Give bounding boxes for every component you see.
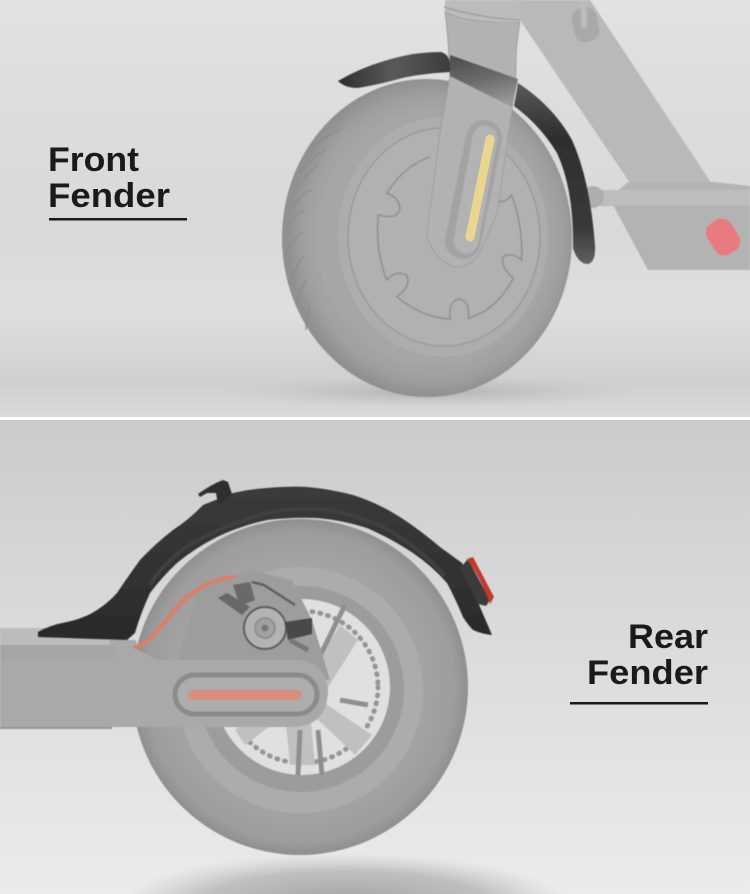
fork slot <box>463 138 485 241</box>
heading: Rear Fender: Fender <box>587 654 708 692</box>
scooter frame <box>515 0 750 270</box>
heading: Front Fender: Front <box>48 141 139 179</box>
tail strip <box>188 690 302 700</box>
heading: Rear Fender: Rear <box>628 618 708 656</box>
front fender shape <box>338 52 595 264</box>
rear fender shape <box>38 480 494 640</box>
heading: Rear Fender <box>570 618 708 704</box>
heading: Front Fender <box>48 141 187 220</box>
tail light housing <box>460 559 490 606</box>
rear wheel <box>132 519 468 855</box>
wheel <box>282 79 572 397</box>
heading: Front Fender: Fender <box>48 177 170 215</box>
panel: rear fender <box>0 420 750 894</box>
brake assembly <box>218 582 312 650</box>
icon: reflector strip <box>470 139 490 237</box>
scooter deck and swingarm <box>0 628 328 729</box>
panel: front fender <box>0 0 750 417</box>
fork <box>427 0 520 267</box>
wheel ground shadow <box>230 376 630 408</box>
tail light <box>467 557 494 604</box>
wheel ground shadow <box>120 852 570 894</box>
fender hook <box>198 480 232 505</box>
brake cable <box>136 577 233 647</box>
